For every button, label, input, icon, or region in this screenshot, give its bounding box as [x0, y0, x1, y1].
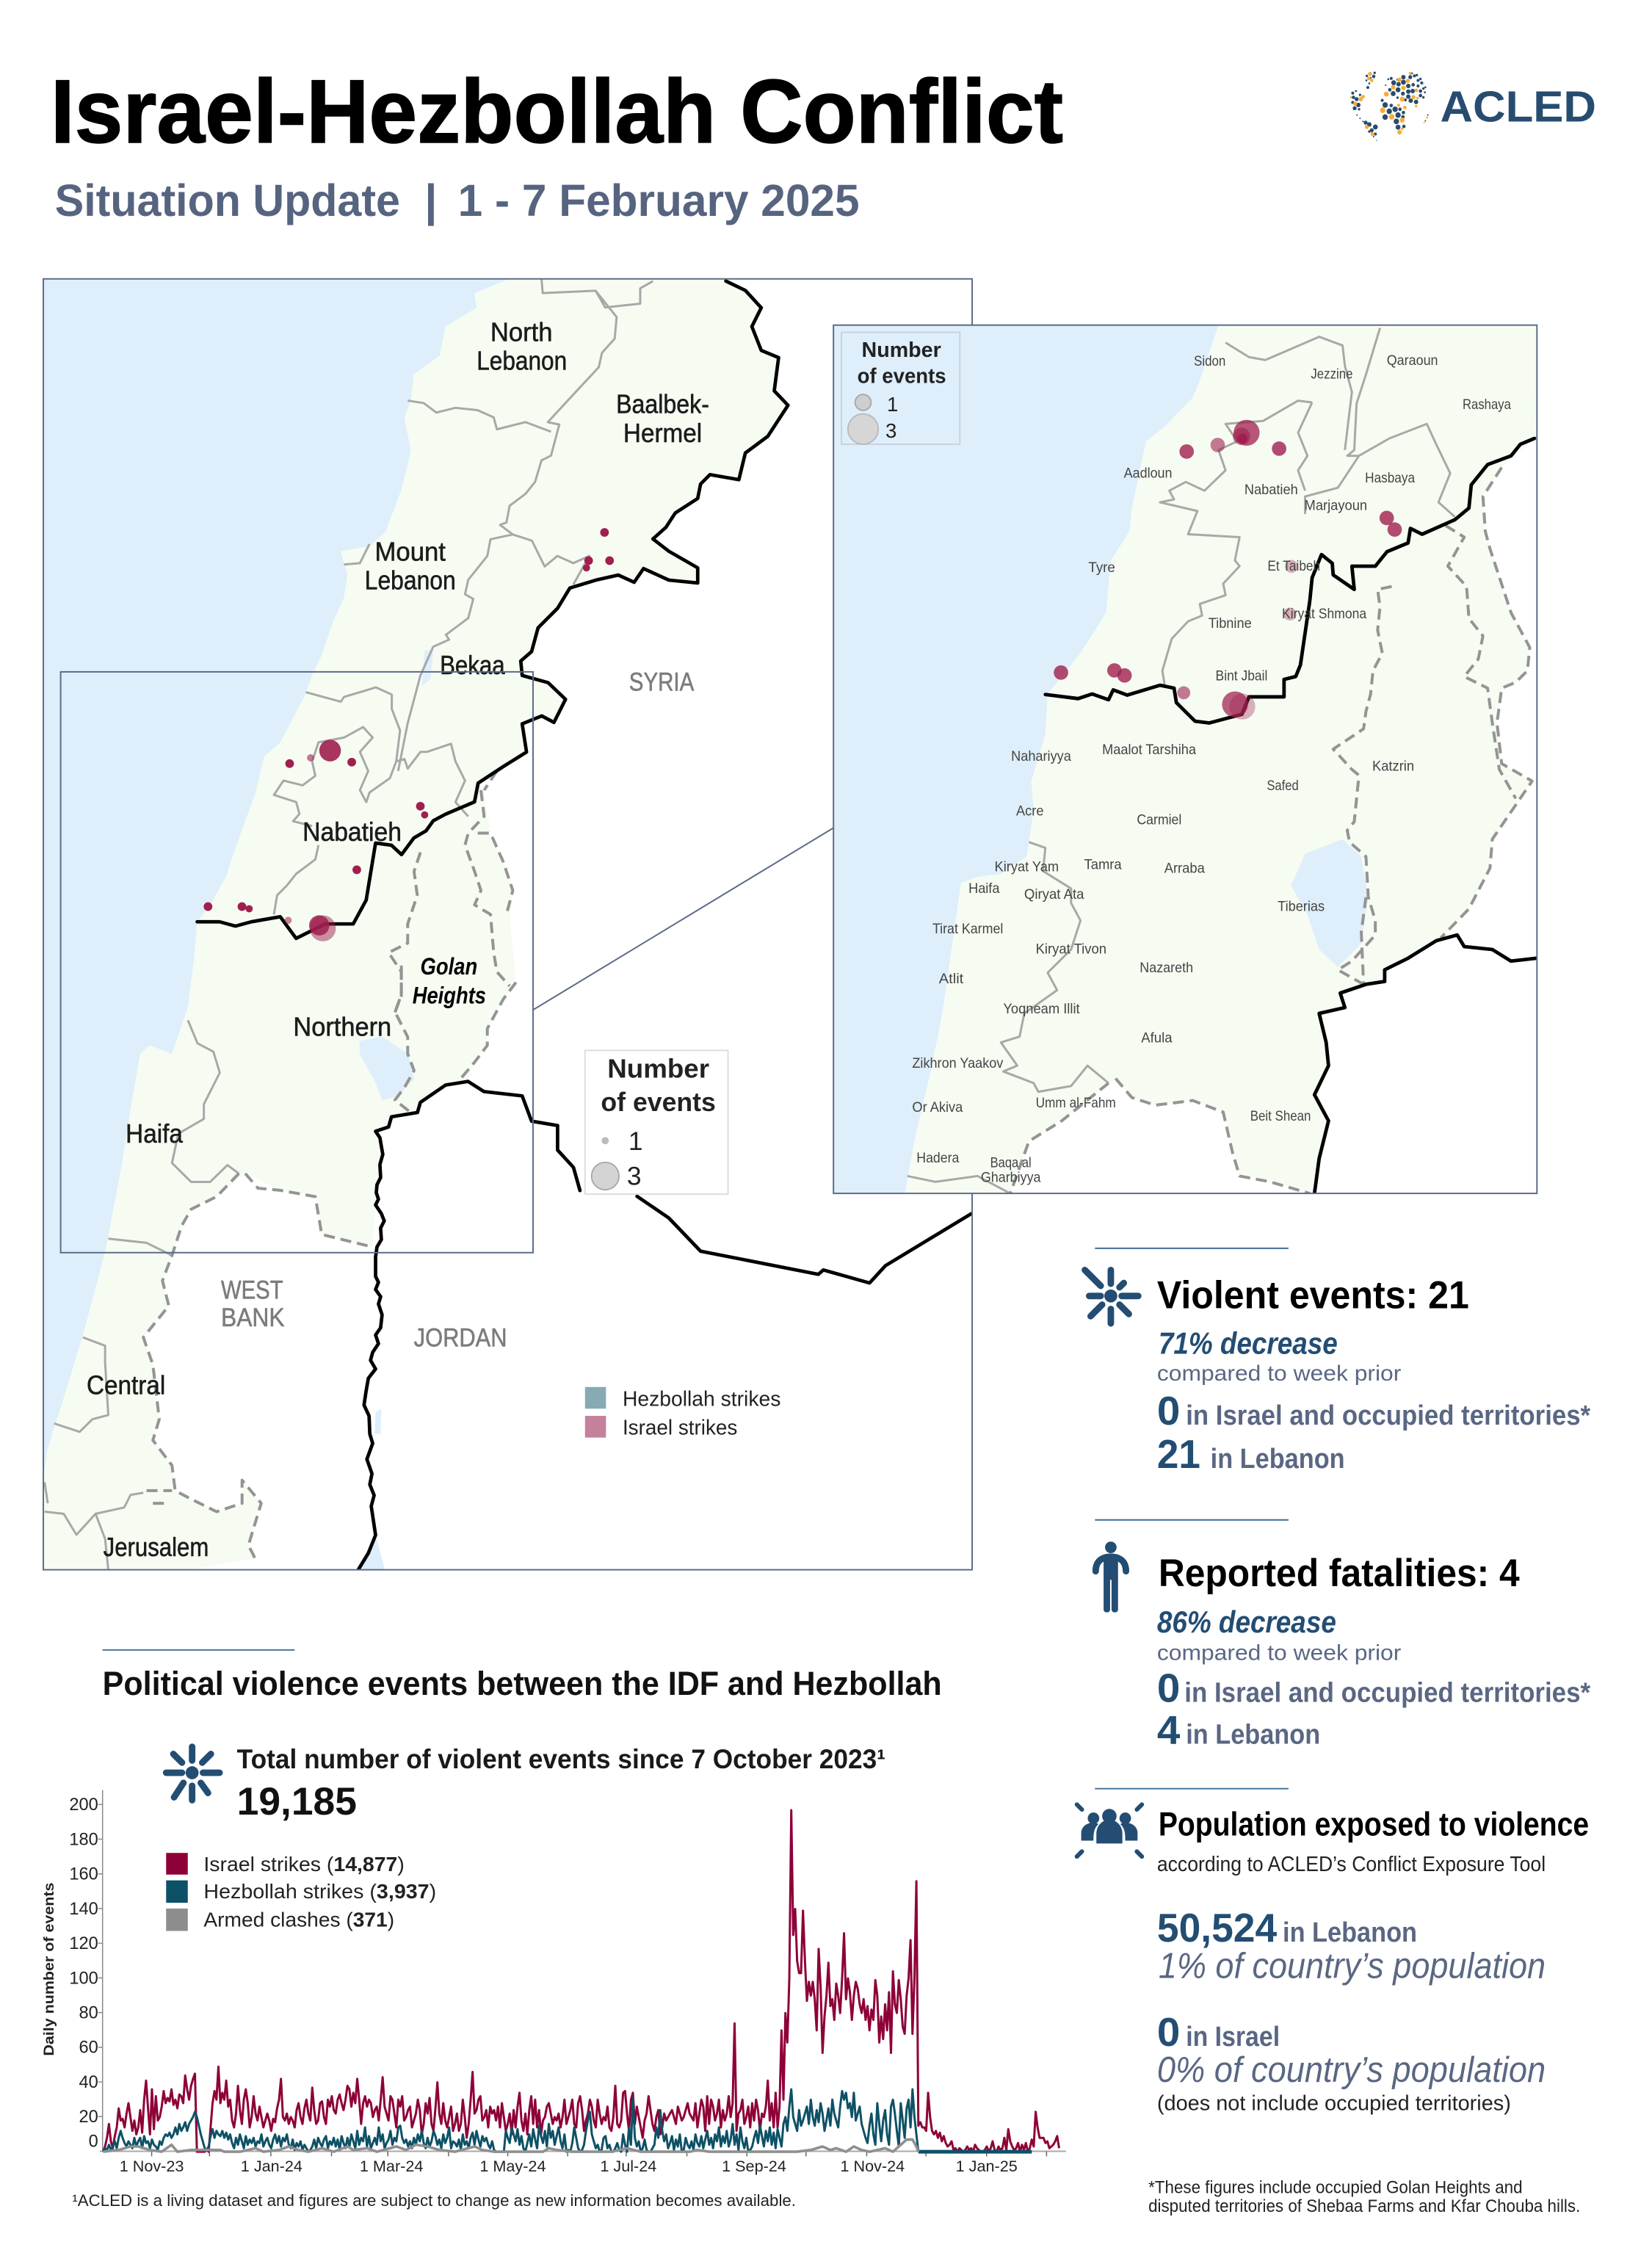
inset city labels: Acre	[1016, 803, 1043, 820]
Lebanon count: 4	[1157, 1707, 1181, 1753]
map labels: North	[490, 317, 553, 347]
footnote: occupied territories: *These figures include occupied Golan Heights and	[1148, 2179, 1523, 2198]
x axis: 1 Jul-24	[600, 2157, 656, 2175]
Israel count	[1157, 1666, 1590, 1711]
land	[905, 325, 1539, 1193]
y axis: 40	[79, 2073, 98, 2092]
map labels: Heights	[413, 982, 486, 1008]
change: 86% decrease	[1157, 1605, 1336, 1639]
subtitle: 1 - 7 February 2025	[458, 176, 860, 225]
inset city labels: Arraba	[1164, 860, 1205, 876]
chart legend: Armed clashes (371)	[203, 1909, 394, 1931]
x axis: 1 May-24	[479, 2157, 546, 2175]
country labels: WEST	[221, 1276, 283, 1305]
chart heading: Political violence events between the IDF and Hezbollah	[103, 1665, 942, 1702]
panel: chart section	[41, 1650, 1066, 2175]
inset city labels: Hasbaya	[1365, 470, 1415, 486]
subtitle	[55, 176, 860, 227]
inset city labels: Tibnine	[1209, 615, 1252, 632]
legend: number of events inset: 1	[887, 393, 898, 416]
heading: Reported fatalities: 4	[1159, 1552, 1520, 1595]
series: Israel strikes	[103, 1810, 1059, 2152]
inset city labels: Tamra	[1084, 856, 1122, 872]
inset city labels: Nahariyya	[1011, 748, 1071, 764]
Lebanon count	[1157, 1431, 1345, 1477]
inset city labels: Rashaya	[1463, 397, 1511, 413]
total value: 19,185	[237, 1780, 357, 1823]
Israel exposure: in Israel	[1186, 2021, 1280, 2053]
legend: number of events main: of events	[601, 1087, 716, 1117]
map labels: Mount	[375, 536, 446, 566]
chart legend: Israel strikes (14,877)	[203, 1853, 405, 1876]
heading: Population exposed to violence	[1159, 1806, 1589, 1843]
inset city labels: Et Taibeh	[1267, 558, 1320, 574]
x axis: 1 Nov-24	[840, 2157, 905, 2175]
inset city labels: Aadloun	[1124, 465, 1173, 481]
inset city labels: Haifa	[968, 880, 999, 897]
Israel count: in Israel and occupied territories*	[1186, 1400, 1590, 1431]
sea	[834, 326, 1218, 1193]
y axis: 20	[79, 2108, 98, 2127]
Israel count: 0	[1157, 1666, 1180, 1711]
legend: strike types: Hezbollah strikes	[623, 1387, 780, 1411]
Israel count: in Israel and occupied territories*	[1184, 1677, 1590, 1709]
legend: number of events inset: Number	[862, 339, 941, 362]
inset city labels: Carmiel	[1137, 811, 1181, 828]
icon: person	[1095, 1541, 1126, 1613]
change: 71% decrease	[1159, 1326, 1338, 1360]
Israel exposure: 0	[1157, 2009, 1180, 2055]
inset city labels: Kiryat Shmona	[1282, 606, 1366, 622]
inset city labels: Marjayoun	[1305, 498, 1367, 514]
y axis: 0	[89, 2133, 98, 2152]
legend: number of events inset	[841, 333, 960, 444]
dashed boundaries	[1010, 468, 1532, 1193]
y axis: 120	[69, 1934, 98, 1953]
legend: strike types	[585, 1387, 780, 1440]
inset city labels: Atlit	[939, 971, 964, 987]
sea	[43, 279, 510, 1478]
map labels: Hermel	[623, 418, 702, 448]
map labels: Nabatieh	[302, 817, 402, 847]
legend: number of events main: 3	[627, 1161, 642, 1190]
inset city labels	[912, 352, 1511, 1185]
y axis title: Daily number of events	[41, 1882, 57, 2056]
map labels: Haifa	[126, 1118, 184, 1149]
x axis: 1 Jan-24	[241, 2157, 302, 2175]
exclusion note: (does not include occupied territories)	[1157, 2091, 1511, 2115]
source: according to ACLED’s Conflict Exposure Tool	[1157, 1853, 1546, 1876]
country labels	[221, 667, 695, 1353]
inset city labels: Qiryat Ata	[1024, 886, 1084, 903]
line chart: daily events	[103, 1810, 1059, 2152]
inset city labels: Kiryat Yam	[995, 858, 1059, 875]
y axis	[69, 1790, 103, 2152]
legend: number of events main	[585, 1050, 728, 1194]
Lebanon exposure	[1157, 1905, 1417, 1950]
x axis: 1 Nov-23	[120, 2157, 184, 2175]
subtitle: |	[424, 176, 437, 227]
Lebanon share: 1% of country’s population	[1159, 1945, 1546, 1986]
map labels: Golan	[421, 953, 477, 980]
Israel count	[1157, 1388, 1590, 1433]
legend: strike types: Israel strikes	[623, 1417, 737, 1440]
inset city labels: Kiryat Tivon	[1036, 941, 1106, 958]
x axis: 1 Jan-25	[956, 2157, 1018, 2175]
map labels: Jerusalem	[104, 1532, 209, 1562]
legend: number of events main: Number	[607, 1054, 709, 1084]
country labels: JORDAN	[414, 1323, 507, 1353]
inset city labels: Katzrin	[1372, 759, 1414, 775]
map labels: Lebanon	[477, 346, 567, 376]
Lebanon count: in Lebanon	[1186, 1719, 1320, 1751]
footnote: occupied territories	[1148, 2179, 1580, 2216]
inset city labels: Qaraoun	[1387, 352, 1438, 369]
y axis: 200	[69, 1795, 98, 1815]
inset city labels: Safed	[1267, 778, 1299, 794]
legend: number of events inset: 3	[885, 419, 896, 442]
note: compared to week prior	[1157, 1641, 1402, 1666]
inset city labels: Afula	[1141, 1030, 1173, 1046]
chart legend	[166, 1853, 436, 1931]
series: Hezbollah flat tail	[919, 2150, 1032, 2154]
Lebanon exposure: 50,524	[1157, 1905, 1278, 1950]
y axis: 100	[69, 1969, 98, 1988]
chart legend: Hezbollah strikes ( 3,937)	[203, 1880, 436, 1903]
map border	[43, 279, 972, 1570]
country labels: BANK	[221, 1303, 285, 1332]
icon: starburst	[1085, 1270, 1138, 1323]
series: Armed clashes	[103, 2140, 919, 2152]
logo: ACLED	[1350, 71, 1596, 141]
admin boundaries south	[45, 966, 516, 1569]
inset city labels: Jezzine	[1311, 366, 1353, 383]
map labels: Baalbek-	[616, 389, 709, 419]
panel: reported fatalities	[1095, 1520, 1590, 1753]
y axis: 160	[69, 1865, 98, 1884]
inset city labels: Yoqneam Illit	[1003, 1001, 1080, 1017]
panel: inset map	[814, 317, 1539, 1245]
gray boundaries	[907, 328, 1455, 1193]
inset city labels: Bint Jbail	[1216, 668, 1267, 684]
border: black international boundaries	[198, 281, 788, 938]
inset city labels: Maalot Tarshiha	[1102, 742, 1196, 758]
Lebanon count: 21	[1157, 1431, 1200, 1477]
series: Hezbollah strikes	[103, 2089, 919, 2152]
water bodies	[357, 650, 433, 1570]
map labels: Bekaa	[440, 650, 505, 680]
map labels: Lebanon	[365, 565, 456, 596]
inset city labels: Tyre	[1088, 560, 1115, 576]
inset border	[833, 325, 1537, 1193]
panel: population exposed	[1077, 1789, 1589, 2115]
panel: main map	[43, 279, 972, 1570]
black boundaries	[1046, 438, 1535, 723]
Israel share: 0% of country’s population	[1157, 2050, 1546, 2090]
inset frame on main map	[61, 672, 533, 1253]
connector line	[533, 828, 833, 1010]
y axis: 180	[69, 1830, 98, 1849]
footnote: occupied territories: disputed territories of Shebaa Farms and Kfar Chouba hills.	[1148, 2197, 1580, 2216]
note: compared to week prior	[1157, 1361, 1402, 1386]
country labels: SYRIA	[629, 667, 695, 696]
x axis	[100, 2151, 1066, 2175]
map labels: Central	[87, 1370, 165, 1400]
icon: people	[1077, 1804, 1142, 1856]
footnote: living dataset: ¹ACLED is a living dataset and figures are subject to change as new information becomes available.	[72, 2191, 796, 2210]
inset city labels: Hadera	[916, 1150, 959, 1166]
subtitle: Situation Update	[55, 176, 400, 225]
title: Israel-Hezbollah Conflict	[51, 62, 1063, 162]
x axis: 1 Mar-24	[360, 2157, 423, 2175]
inset city labels: Sidon	[1194, 353, 1225, 369]
admin boundaries north	[274, 279, 653, 1013]
y axis: 140	[69, 1900, 98, 1919]
icon: starburst	[166, 1747, 220, 1800]
Sea of Galilee	[1291, 839, 1369, 967]
total label: Total number of violent events since 7 October 2023¹	[237, 1743, 885, 1774]
y axis: 60	[79, 2039, 98, 2058]
Lebanon count: in Lebanon	[1211, 1443, 1345, 1475]
inset city labels: Or Akiva	[912, 1099, 963, 1115]
inset city labels: Beit Shean	[1250, 1108, 1311, 1124]
legend: number of events inset: of events	[858, 364, 946, 388]
map labels	[87, 317, 709, 1562]
legend: number of events main: 1	[628, 1126, 643, 1156]
y axis: 80	[79, 2003, 98, 2022]
heading: Violent events: 21	[1157, 1274, 1469, 1317]
Lebanon exposure: in Lebanon	[1283, 1917, 1417, 1948]
Israel exposure	[1157, 2009, 1280, 2055]
map labels: Northern	[293, 1012, 391, 1042]
event dots: inset	[1054, 420, 1402, 720]
land: Lebanon and Israel	[43, 279, 788, 1570]
inset city labels: Baqa al	[990, 1155, 1032, 1171]
Lebanon count	[1157, 1707, 1320, 1753]
x axis: 1 Sep-24	[722, 2157, 786, 2175]
inset city labels: Gharbiyya	[981, 1169, 1041, 1185]
event dots: main map	[203, 528, 614, 941]
inset city labels: Nabatieh	[1245, 482, 1298, 498]
inset city labels: Nazareth	[1140, 960, 1193, 976]
inset city labels: Tirat Karmel	[932, 921, 1003, 937]
inset city labels: Zikhron Yaakov	[912, 1055, 1003, 1071]
inset city labels: Tiberias	[1278, 898, 1325, 914]
inset city labels: Umm al-Fahm	[1036, 1095, 1116, 1111]
Israel count: 0	[1157, 1388, 1180, 1433]
logo: ACLED: ACLED	[1440, 82, 1596, 131]
panel: violent events	[1085, 1248, 1590, 1477]
